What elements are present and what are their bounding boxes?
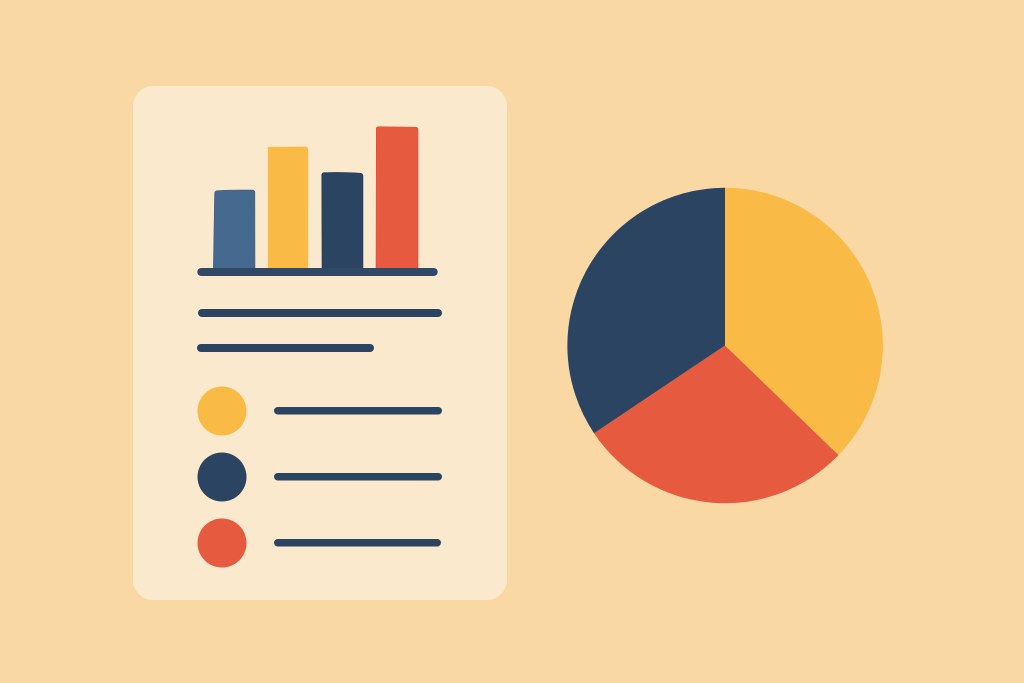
legend line: yellow [274,407,442,414]
bar chart [197,127,438,276]
pie chart [567,188,883,503]
legend line: red [274,539,441,546]
pie slice: yellow [725,188,883,455]
text line: short [197,344,374,352]
legend [198,386,442,568]
panel: report document [133,86,507,600]
chart baseline [197,268,438,276]
pie slice: red [594,346,838,503]
text line: long [198,309,442,317]
bar: yellow [268,147,308,268]
legend line: navy [274,473,442,480]
legend dot: red [198,518,246,568]
bar: red [376,127,418,268]
pie slice: navy [567,188,725,433]
legend dot: navy [198,452,246,502]
document card [133,86,507,600]
bar: navy [322,172,363,268]
bar: blue [213,190,255,268]
legend dot: yellow [198,386,246,436]
